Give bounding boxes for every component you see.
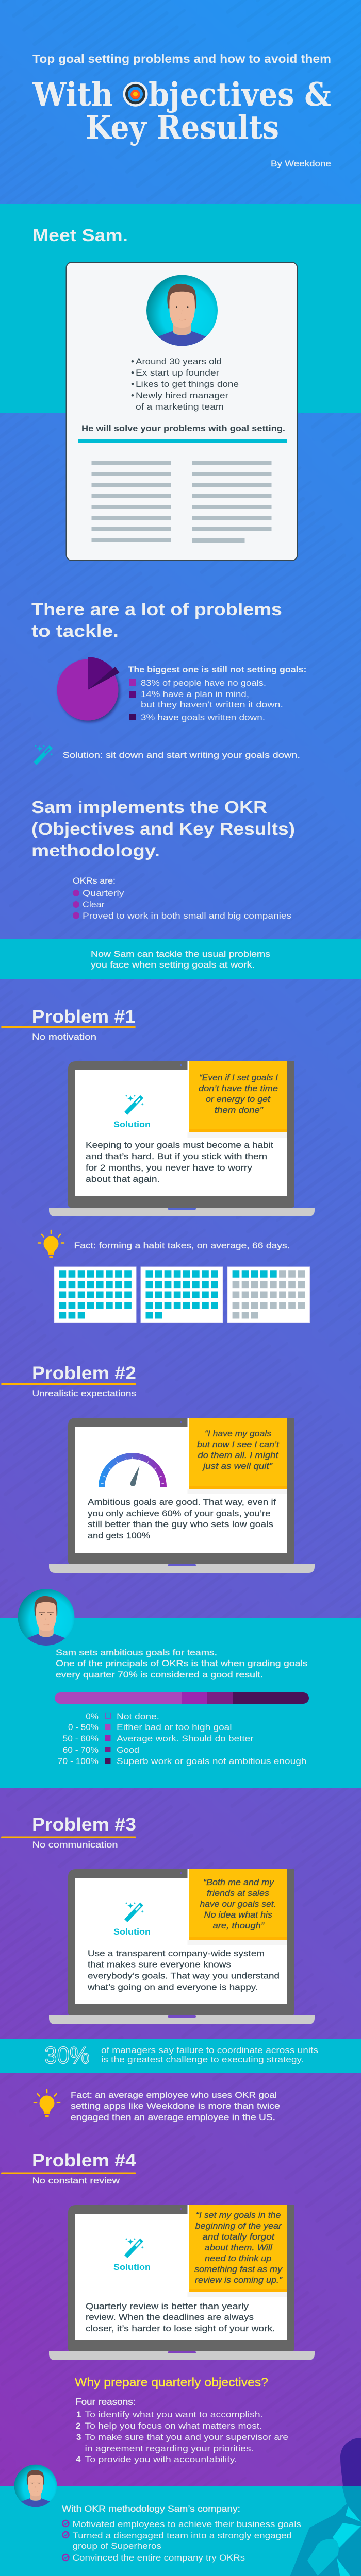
solution text: Keeping to your goals must become a habit <box>86 1140 273 1150</box>
heading: problem 2: Unrealistic expectations <box>32 1388 136 1398</box>
solution text: Quarterly review is better than yearly <box>86 2301 249 2311</box>
panel: laptop problem 2 <box>49 1418 315 1573</box>
legend: grading scale: 0% <box>86 1711 99 1721</box>
header block <box>32 52 331 168</box>
panel: laptop problem 1 <box>49 1061 315 1216</box>
list: Sam traits: of a marketing team <box>136 402 224 412</box>
sticky note quote: “I set my goals in the <box>196 2210 281 2220</box>
block: why prepare quarterly objectives: 2 <box>76 2421 80 2431</box>
icon: light bulb <box>34 2090 60 2117</box>
panel: laptop problem 3 <box>49 1869 315 2024</box>
heading: Meet Sam: Meet Sam. <box>32 226 128 245</box>
solution text: that makes sure everyone knows <box>88 1960 231 1970</box>
sticky note quote: about them. Will <box>204 2243 273 2252</box>
grading text: every quarter 70% is considered a good result. <box>56 1670 263 1680</box>
pie legend: The biggest one is still not setting goals: <box>128 665 306 674</box>
list: Sam traits: • <box>131 368 134 378</box>
legend: grading scale: Good <box>117 1745 139 1755</box>
sticky note quote: beginning of the year <box>195 2221 282 2231</box>
block: why prepare quarterly objectives <box>75 2376 288 2464</box>
list: Sam traits: • <box>131 379 134 389</box>
subtitle: Top goal setting problems and how to avoid them <box>32 52 331 65</box>
heading: problems to tackle: There are a lot of problems <box>31 600 282 619</box>
sticky note quote: review is coming up.” <box>195 2275 283 2285</box>
solution label: Solution <box>113 1120 151 1129</box>
sticky note quote: just as well quit” <box>202 1461 273 1471</box>
heading: problem 1: Problem #1 <box>32 1007 136 1027</box>
sticky note quote <box>188 2205 287 2297</box>
pie legend <box>128 665 306 722</box>
sticky note quote <box>188 1418 287 1494</box>
sticky note quote <box>188 1869 287 1945</box>
solution text: about that again. <box>86 1174 160 1184</box>
fact: engagement: engaged then an average employee in the US. <box>71 2112 275 2122</box>
icon: solution wand <box>124 1902 144 1922</box>
fact: habit days <box>38 1230 290 1258</box>
sticky note quote: need to think up <box>205 2253 271 2263</box>
legend: grading scale: Average work. Should do better <box>117 1734 254 1743</box>
panel: ambitious goals band <box>0 1589 361 1788</box>
solution text: and that’s hard. But if you stick with them <box>86 1151 267 1161</box>
card statement: He will solve your problems with goal setting. <box>81 423 285 433</box>
legend: grading scale: 60 - 70% <box>63 1745 99 1755</box>
grading text <box>56 1648 307 1680</box>
block: why prepare quarterly objectives: To provide you with accountability. <box>85 2454 237 2464</box>
heading: problem 3: No communication <box>32 1840 118 1850</box>
list: OKRs are: Proved to work in both small and big companies <box>83 911 291 921</box>
list: Sam traits <box>131 357 239 412</box>
heading: problem 3: Problem #3 <box>32 1815 136 1835</box>
heading: problem 4: Problem #4 <box>32 2150 137 2171</box>
solution text: review. When the deadlines are always <box>86 2312 254 2322</box>
heading: problem 2 <box>1 1363 136 1398</box>
solution text: still better than the guy who sets low goals <box>88 1519 273 1529</box>
sticky note quote: No idea what his <box>204 1910 273 1920</box>
list: Sam traits: • <box>131 357 134 366</box>
icon: Sam portrait <box>18 1589 74 1650</box>
results checklist: group of Superheros <box>72 2541 161 2551</box>
sticky note quote: do them all. I might <box>198 1450 279 1460</box>
icon: magic wand <box>34 745 53 765</box>
solution text: Ambitious goals are good. That way, even if <box>88 1497 276 1507</box>
sticky note quote: “I have my goals <box>205 1429 272 1438</box>
list: OKRs are: OKRs are: <box>73 876 116 886</box>
list: Sam traits: • <box>131 391 134 400</box>
legend: grading scale: 70 - 100% <box>58 1756 99 1766</box>
sticky note quote: but now I see I can’t <box>197 1439 280 1449</box>
solution text: for 2 months, you never have to worry <box>86 1163 253 1173</box>
byline: By Weekdone <box>271 159 331 168</box>
band: 30 percent stat <box>0 2039 361 2073</box>
legend: grading scale: 0 - 50% <box>68 1722 99 1732</box>
band: usual problems: you face when setting goals at work. <box>91 960 255 970</box>
list: Sam traits: Likes to get things done <box>136 379 239 389</box>
legend: grading scale: Not done. <box>117 1711 159 1721</box>
heading: OKR methodology <box>31 798 295 860</box>
heading: OKR methodology: Sam implements the OKR <box>31 798 267 817</box>
main title <box>32 75 331 146</box>
sticky note quote: don’t have the time <box>199 1083 278 1093</box>
pie chart: goal setting <box>57 657 120 720</box>
sticky note quote: them done” <box>215 1105 264 1115</box>
main title: Key Results <box>86 108 279 146</box>
sticky note quote: “Both me and my <box>203 1877 275 1887</box>
list: Sam traits: Around 30 years old <box>136 357 222 366</box>
pie legend: but they haven’t written it down. <box>141 700 283 709</box>
solution text: what’s going on and everyone is happy. <box>87 1982 258 1992</box>
grading text: One of the principals of OKRs is that when grading goals <box>56 1658 307 1668</box>
block: why prepare quarterly objectives: Why prepare quarterly objectives? <box>75 2376 268 2389</box>
block: why prepare quarterly objectives: 3 <box>76 2432 81 2442</box>
main title: With <box>32 75 113 113</box>
icon: superhero body <box>288 2486 361 2576</box>
solution text: and gets 100% <box>88 1531 150 1540</box>
block: why prepare quarterly objectives: To help you focus on what matters most. <box>85 2421 262 2431</box>
heading: problem 1 <box>1 1007 136 1042</box>
main title: bjectives & <box>149 75 331 113</box>
block: why prepare quarterly objectives: 4 <box>76 2454 81 2464</box>
solution text <box>86 1140 273 1184</box>
list: OKRs are <box>73 876 291 921</box>
block: why prepare quarterly objectives: To make sure that you and your supervisor are <box>85 2432 288 2442</box>
pie legend: 83% of people have no goals. <box>141 678 266 688</box>
solution text: everybody’s goals. That way you understand <box>88 1971 280 1980</box>
panel: Sam's company results band <box>0 2465 361 2576</box>
heading: problems to tackle <box>31 600 282 640</box>
solution label: Solution <box>113 2262 151 2272</box>
band: usual problems <box>0 939 361 979</box>
stat number: 30% <box>44 2042 90 2069</box>
sticky note quote: have our goals set. <box>200 1899 276 1909</box>
list: Sam traits: Ex start up founder <box>136 368 219 378</box>
solution text: closer, it’s harder to lose sight of your work. <box>86 2324 275 2333</box>
sticky note quote <box>188 1061 287 1138</box>
legend: grading scale: Either bad or too high goal <box>117 1722 232 1732</box>
heading: problem 1: No motivation <box>32 1032 96 1042</box>
panel: laptop problem 4 <box>49 2205 315 2360</box>
results text: With OKR methodology Sam’s company: <box>62 2504 240 2514</box>
icon: target as letter O <box>123 82 147 107</box>
pie legend: 14% have a plan in mind, <box>141 689 249 699</box>
block: why prepare quarterly objectives: in agreement regarding your priorities. <box>85 2444 254 2453</box>
sticky note quote: are, though” <box>212 1921 265 1930</box>
solution text: Use a transparent company-wide system <box>88 1948 265 1958</box>
list: OKRs are: Quarterly <box>83 888 124 898</box>
cyan divider bar <box>78 439 287 443</box>
placeholder text lines <box>92 461 271 543</box>
sticky note quote: and totally forgot <box>202 2232 275 2242</box>
solution line with wand icon: Solution: sit down and start writing your goals down. <box>63 750 300 760</box>
fact: engagement <box>34 2090 280 2122</box>
sticky note quote: friends at sales <box>207 1888 270 1898</box>
band: usual problems: Now Sam can tackle the usual problems <box>91 949 270 959</box>
list: Sam traits: Newly hired manager <box>136 391 228 400</box>
chart: 66 day calendars <box>54 1267 309 1323</box>
solution text <box>87 1948 280 1992</box>
sticky note quote: something fast as my <box>194 2264 283 2274</box>
solution label: Solution <box>113 1927 151 1937</box>
fact: engagement: setting apps like Weekdone is more than twice <box>71 2101 280 2111</box>
solution line with wand icon <box>34 745 300 765</box>
results checklist: Motivated employees to achieve their business goals <box>72 2519 301 2529</box>
icon: light bulb <box>38 1230 64 1258</box>
band: 30 percent stat: is the greatest challenge to executing strategy. <box>101 2055 304 2064</box>
icon: solution wand <box>124 1095 144 1115</box>
pie legend: 3% have goals written down. <box>141 713 265 722</box>
icon: solution wand <box>124 2238 144 2258</box>
solution text <box>88 1497 276 1540</box>
block: why prepare quarterly objectives: To identify what you want to accomplish. <box>85 2410 263 2419</box>
legend: grading scale: 50 - 60% <box>63 1734 99 1743</box>
results checklist: Convinced the entire company try OKRs <box>72 2553 245 2563</box>
heading: OKR methodology: methodology. <box>31 841 160 860</box>
icon: Sam portrait <box>14 2465 57 2511</box>
sticky note quote: “Even if I set goals I <box>199 1073 278 1082</box>
icon: speedometer gauge <box>101 1456 164 1487</box>
legend: grading scale <box>58 1711 307 1766</box>
icon: Sam portrait <box>146 275 218 351</box>
heading: problem 3 <box>1 1815 136 1850</box>
sticky note quote: or energy to get <box>206 1094 271 1104</box>
results checklist: Turned a disengaged team into a strongly engaged <box>72 2531 292 2540</box>
fact: habit days: Fact: forming a habit takes, on average, 66 days. <box>74 1241 290 1250</box>
heading: problem 2: Problem #2 <box>32 1363 136 1383</box>
fact: engagement: Fact: an average employee who uses OKR goal <box>71 2090 277 2100</box>
icon: superhero cape <box>340 2438 361 2486</box>
band: 30 percent stat: of managers say failure to coordinate across units <box>101 2045 318 2055</box>
heading: problem 4: No constant review <box>32 2176 120 2185</box>
legend: grading scale: Superb work or goals not ambitious enough <box>117 1756 306 1766</box>
results checklist <box>63 2519 301 2563</box>
solution text: you only achieve 60% of your goals, you’re <box>88 1509 270 1518</box>
panel: Sam profile card <box>66 262 297 561</box>
panel: meet Sam band <box>0 204 361 413</box>
block: why prepare quarterly objectives: 1 <box>76 2410 81 2419</box>
heading: OKR methodology: (Objectives and Key Results) <box>31 819 295 838</box>
grading text: Sam sets ambitious goals for teams. <box>56 1648 217 1657</box>
list: OKRs are: Clear <box>83 900 105 909</box>
block: why prepare quarterly objectives: Four reasons: <box>75 2397 136 2407</box>
heading: problem 4 <box>1 2150 137 2185</box>
solution text <box>86 2301 275 2333</box>
heading: problems to tackle: to tackle. <box>31 621 119 640</box>
bar chart: grading scale <box>55 1692 309 1704</box>
